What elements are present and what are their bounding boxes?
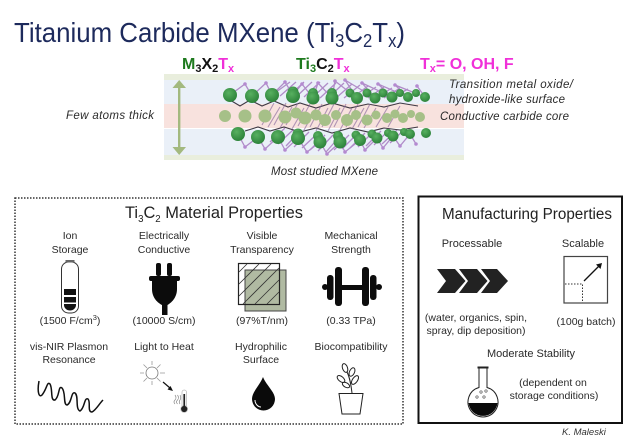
property: mechanical strength: Strength bbox=[331, 244, 371, 256]
heading: 2 bbox=[155, 214, 161, 225]
property: scalable: (100g batch) bbox=[557, 316, 615, 328]
property: scalable bbox=[557, 238, 615, 328]
property: hydrophilic surface: Hydrophilic bbox=[235, 341, 287, 353]
property: ion storage: 3 bbox=[93, 313, 97, 322]
property: hydrophilic surface bbox=[235, 341, 287, 410]
layer bands bbox=[164, 74, 464, 160]
title: x bbox=[388, 31, 396, 51]
property: scalable: Scalable bbox=[562, 238, 604, 250]
property: visible transparency: (97%T/nm) bbox=[236, 315, 288, 327]
icon: flask bbox=[468, 366, 498, 417]
icon: chevrons bbox=[437, 269, 508, 293]
property: processable: (water, organics, spin, bbox=[425, 312, 527, 324]
formula: Ti3C2Tx: C bbox=[316, 56, 328, 73]
icon: wave bbox=[38, 381, 103, 412]
icon: overlapping sheets bbox=[238, 264, 286, 311]
icon: water drop bbox=[252, 377, 275, 410]
formula: Tx = O, OH, F: = O, OH, F bbox=[436, 56, 514, 73]
heading: Manufacturing Properties bbox=[442, 206, 612, 223]
property: processable: Processable bbox=[442, 238, 502, 250]
property: electrically conductive: Electrically bbox=[139, 230, 190, 242]
property: processable: spray, dip deposition) bbox=[426, 325, 526, 337]
property: electrically conductive: (10000 S/cm) bbox=[132, 315, 196, 327]
label: surface line 2: hydroxide-like surface bbox=[449, 94, 565, 106]
formula: Tx = O, OH, F: x bbox=[430, 63, 437, 75]
property: moderate stability: (dependent on bbox=[519, 377, 587, 389]
property: moderate stability: storage conditions) bbox=[510, 390, 598, 402]
formula: Ti3C2Tx: 3 bbox=[310, 63, 316, 75]
property: mechanical strength bbox=[322, 230, 382, 327]
formula: M3X2Tx: 3 bbox=[195, 63, 201, 75]
property: moderate stability bbox=[468, 348, 598, 417]
formula: M3X2Tx: T bbox=[218, 56, 228, 73]
purple terminations bbox=[243, 78, 419, 156]
property: light to heat bbox=[134, 341, 194, 412]
formula: M3X2Tx: X bbox=[201, 56, 212, 73]
property: biocompatibility: Biocompatibility bbox=[315, 341, 388, 353]
property: light to heat: Light to Heat bbox=[134, 341, 194, 353]
panel: manufacturing properties bbox=[418, 196, 622, 423]
credit: K. Maleski bbox=[562, 427, 607, 438]
heading: C bbox=[143, 203, 155, 222]
middle titanium atoms bbox=[219, 108, 425, 126]
formula: Ti3C2Tx: 2 bbox=[328, 63, 334, 75]
property: hydrophilic surface: Surface bbox=[243, 354, 279, 366]
property: ion storage: Ion bbox=[63, 230, 77, 242]
icon: dumbbell bbox=[322, 267, 382, 306]
title: ) bbox=[396, 17, 405, 48]
title: 3 bbox=[335, 31, 344, 51]
property: biocompatibility bbox=[315, 341, 388, 414]
property: mechanical strength: Mechanical bbox=[324, 230, 378, 242]
bottom titanium atoms bbox=[231, 127, 431, 148]
formula: M3X2Tx: x bbox=[228, 63, 235, 75]
label: few atoms thick: Few atoms thick bbox=[66, 110, 155, 122]
property: moderate stability: Moderate Stability bbox=[487, 348, 576, 360]
title: 2 bbox=[363, 31, 372, 51]
formula: Ti3C2Tx: Ti bbox=[296, 56, 310, 73]
property: ion storage bbox=[40, 230, 100, 327]
property: visible transparency bbox=[230, 230, 295, 327]
heading: Material Properties bbox=[161, 203, 303, 222]
top titanium atoms bbox=[223, 86, 430, 104]
icon: battery bbox=[62, 260, 78, 313]
label: most studied: Most studied MXene bbox=[271, 166, 378, 178]
label: core: Conductive carbide core bbox=[440, 111, 569, 123]
property: ion storage: Storage bbox=[52, 244, 89, 256]
property: processable bbox=[425, 238, 527, 337]
heading: 3 bbox=[138, 214, 144, 225]
crystal structure bbox=[219, 78, 431, 156]
formula: M3X2Tx: M bbox=[182, 56, 195, 73]
title: C bbox=[344, 17, 363, 48]
formula: Ti3C2Tx: T bbox=[334, 56, 344, 73]
panel: material properties bbox=[15, 198, 403, 424]
property: plasmon resonance: Resonance bbox=[42, 354, 96, 366]
property: visible transparency: Transparency bbox=[230, 244, 295, 256]
arrow: thickness bbox=[172, 80, 186, 155]
title: Titanium Carbide MXene (Ti bbox=[14, 17, 362, 48]
property: visible transparency: Visible bbox=[247, 230, 278, 242]
formula: Ti3C2Tx: x bbox=[344, 63, 351, 75]
title: T bbox=[372, 17, 388, 48]
property: mechanical strength: (0.33 TPa) bbox=[326, 315, 376, 327]
icon: scale chart bbox=[564, 256, 608, 303]
label: surface: Transition metal oxide/ bbox=[449, 79, 575, 91]
icon: sun, arrow, thermometer bbox=[140, 361, 188, 412]
property: ion storage: ) bbox=[97, 315, 100, 327]
property: electrically conductive bbox=[132, 230, 196, 327]
property: electrically conductive: Conductive bbox=[138, 244, 190, 256]
icon: plug bbox=[149, 263, 180, 315]
formula: Tx = O, OH, F: T bbox=[420, 56, 430, 73]
icon: plant in pot bbox=[336, 363, 363, 414]
property: plasmon resonance: vis-NIR Plasmon bbox=[30, 341, 108, 353]
property: plasmon resonance bbox=[30, 341, 108, 412]
heading: Ti bbox=[125, 203, 139, 222]
bonds bbox=[230, 80, 425, 154]
property: ion storage: (1500 F/cm bbox=[40, 315, 93, 327]
formula: M3X2Tx: 2 bbox=[212, 63, 218, 75]
